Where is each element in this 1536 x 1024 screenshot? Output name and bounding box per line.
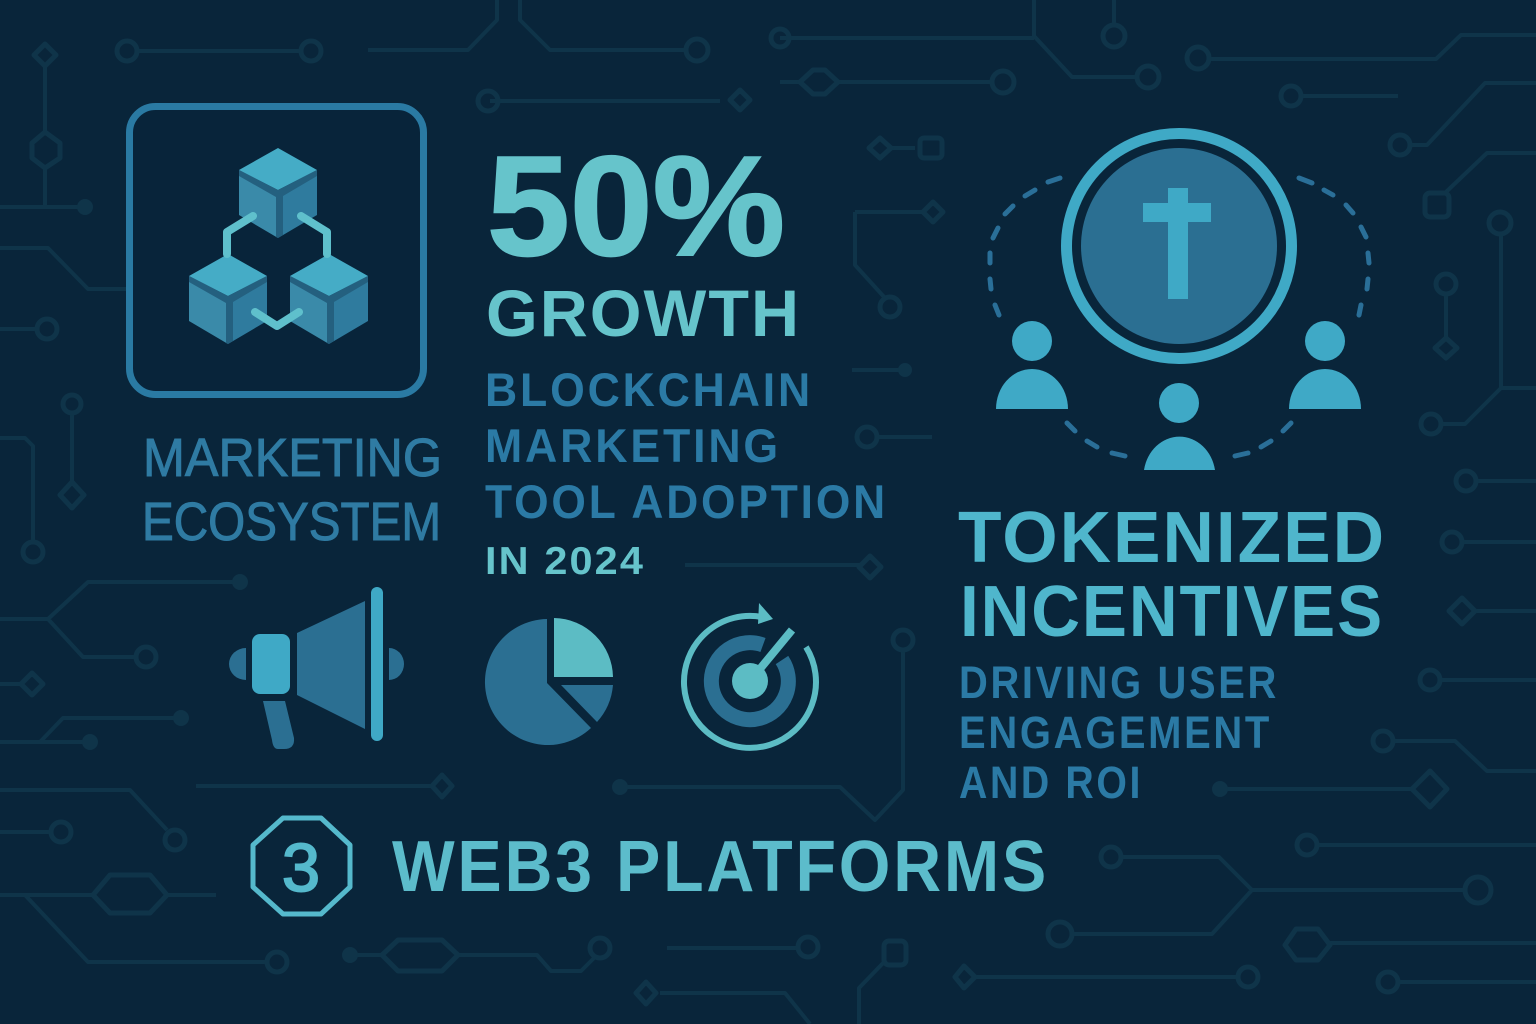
cube: top xyxy=(239,148,317,238)
text: blockchain marketing tool adoption: TOOL ADOPTION xyxy=(485,475,888,528)
label: marketing ecosystem: MARKETING xyxy=(143,428,442,488)
person: right xyxy=(1289,321,1361,409)
panel: marketing ecosystem icon box xyxy=(130,106,424,394)
cube connectors xyxy=(227,216,327,326)
text: driving user engagement and roi: AND ROI xyxy=(959,757,1143,808)
text: driving user engagement and roi xyxy=(959,657,1279,808)
icon: pie chart xyxy=(485,618,613,745)
stat: 50%: 50% xyxy=(487,127,785,286)
text: blockchain marketing tool adoption: BLOCKCHAIN xyxy=(485,363,813,416)
cube: right xyxy=(290,254,368,344)
label: marketing ecosystem xyxy=(142,428,442,552)
token coin xyxy=(1066,134,1292,358)
dashed orbit xyxy=(990,178,1369,456)
label: marketing ecosystem: ECOSYSTEM xyxy=(142,492,441,552)
heading: growth: GROWTH xyxy=(486,276,801,350)
badge: number 3 octagon: 3 xyxy=(282,830,320,906)
icon: blockchain cubes xyxy=(189,148,368,344)
text: blockchain marketing tool adoption xyxy=(485,363,888,528)
icon: megaphone xyxy=(229,587,404,749)
text: driving user engagement and roi: ENGAGEMENT xyxy=(959,707,1272,758)
heading: tokenized incentives: INCENTIVES xyxy=(960,572,1384,652)
person: left xyxy=(996,321,1068,409)
icon: target with arrow xyxy=(684,603,816,748)
text: blockchain marketing tool adoption: MARKETING xyxy=(485,419,781,472)
person: centre xyxy=(1144,383,1215,470)
text: in 2024: IN 2024 xyxy=(485,540,645,583)
cube: left xyxy=(189,254,267,344)
heading: web3 platforms: WEB3 PLATFORMS xyxy=(392,827,1049,907)
heading: tokenized incentives: TOKENIZED xyxy=(958,498,1386,578)
badge: number 3 octagon xyxy=(253,818,350,914)
heading: tokenized incentives xyxy=(958,498,1386,652)
icon: token cross with community xyxy=(990,134,1369,470)
text: driving user engagement and roi: DRIVING USER xyxy=(959,657,1279,708)
